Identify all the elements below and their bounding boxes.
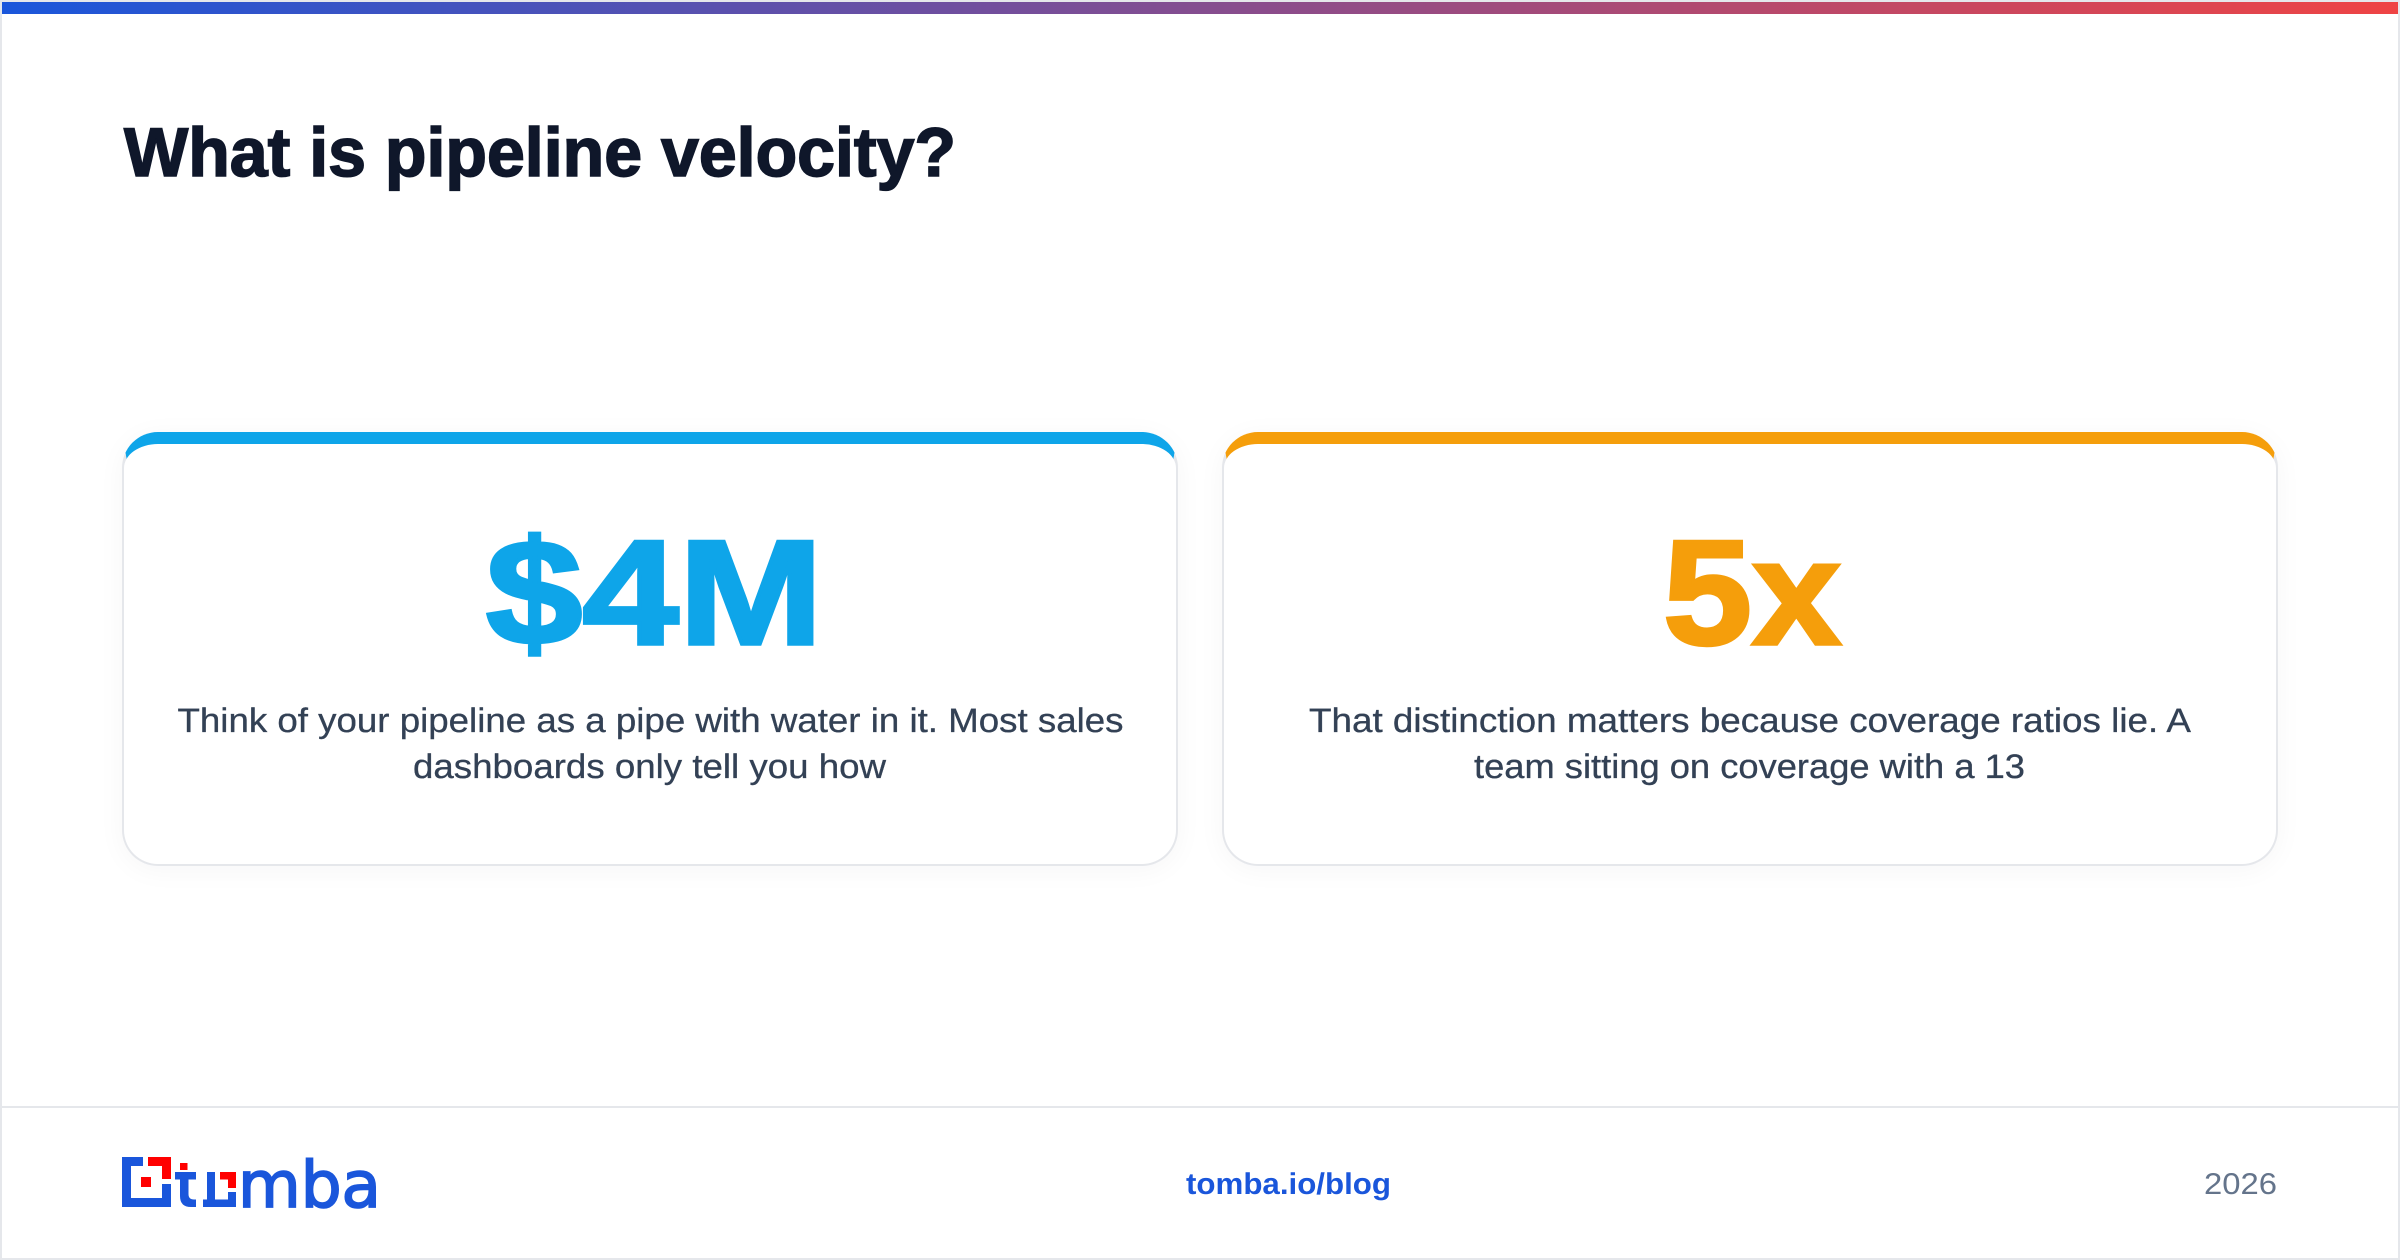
icon: stylised t and o [175, 1163, 236, 1207]
footer [2, 1106, 2398, 1258]
description: pipeline as a pipe: dashboards only tell you how [413, 748, 886, 786]
description: coverage ratios [1309, 702, 2191, 786]
wordmark: mba: mba [238, 1149, 381, 1223]
top gradient bar [2, 2, 2398, 14]
logo: tomba [122, 1149, 381, 1223]
stat: $4M: $4M [486, 509, 823, 676]
panel: 5x card [1222, 432, 2278, 866]
icon: logo mark [122, 1157, 171, 1207]
stat: 5x: 5x [1663, 509, 1841, 676]
description: coverage ratios: team sitting on coverage with a 13 [1474, 748, 2025, 786]
title: What is pipeline velocity? [124, 114, 956, 191]
description: coverage ratios: That distinction matters because coverage ratios lie. A [1309, 702, 2191, 740]
panel: $4M card [122, 432, 1178, 866]
link: tomba.io/blog: tomba.io/blog [1186, 1168, 1391, 1201]
description: pipeline as a pipe: Think of your pipeline as a pipe with water in it. Most sales [178, 702, 1124, 740]
description: pipeline as a pipe [178, 702, 1124, 786]
year: 2026 [2204, 1168, 2277, 1201]
